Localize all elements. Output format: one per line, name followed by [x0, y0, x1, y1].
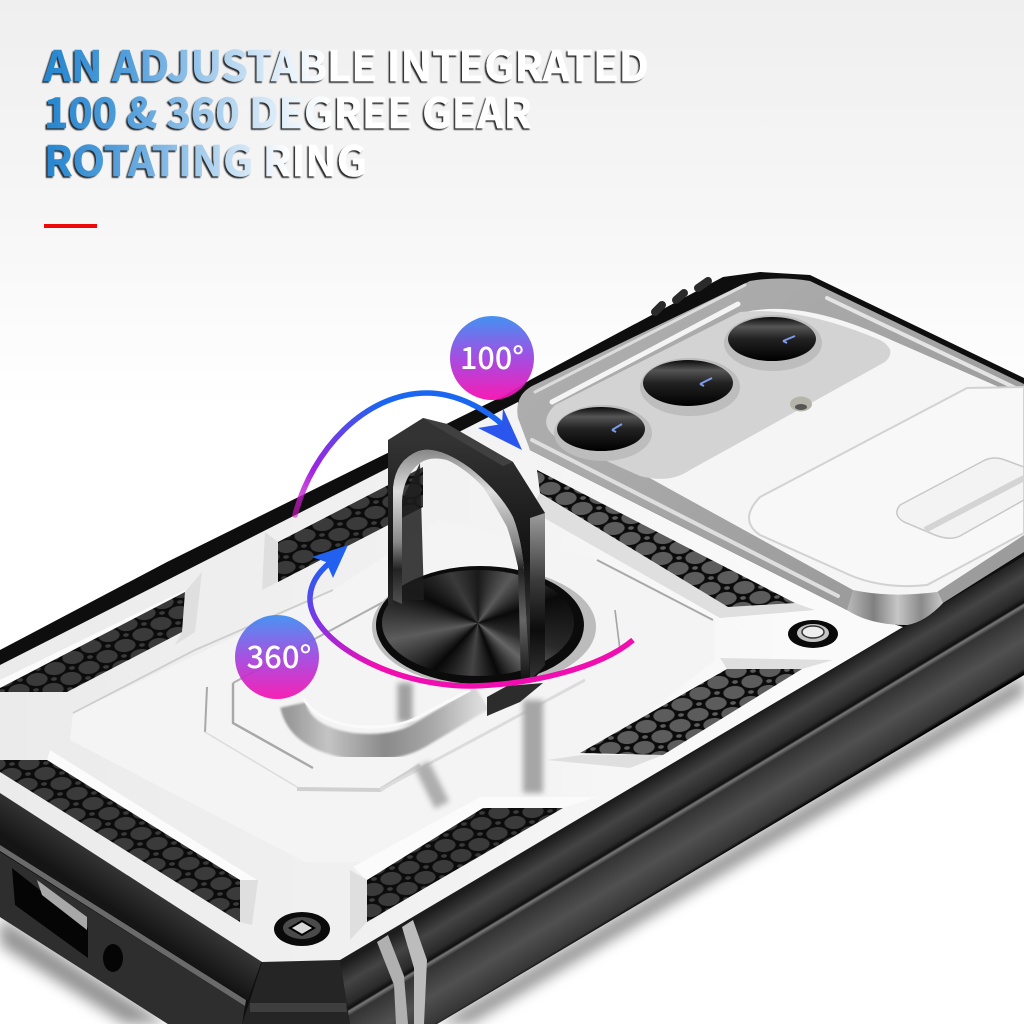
- ring base recess: [372, 567, 596, 687]
- arrowhead: [478, 408, 522, 450]
- lens cover slide: [749, 387, 1024, 586]
- ring inner chrome: [393, 450, 530, 683]
- badge 100 degrees: 100°: [460, 333, 524, 378]
- lens 2: [640, 358, 740, 416]
- lens 3: [724, 315, 822, 371]
- title: [43, 33, 649, 189]
- title line 1: AN ADJUSTABLE INTEGRATED: [43, 33, 649, 94]
- title line 2: 100 & 360 DEGREE GEAR: [44, 80, 532, 141]
- frame corner chrome: [847, 590, 943, 625]
- reflected ring band: [293, 698, 482, 747]
- screw right: [788, 620, 838, 648]
- brushed metal disc: [382, 570, 574, 676]
- badge 100 degrees: [450, 316, 534, 400]
- grip patch under camera: [537, 470, 795, 607]
- side buttons: [655, 281, 708, 312]
- frame highlights: [532, 285, 1024, 596]
- ring base disc: [376, 566, 584, 684]
- white rib highlights: [0, 590, 597, 880]
- title line 3: ROTATING RING: [44, 128, 367, 189]
- grip patch beside ring: [278, 467, 423, 582]
- raised rib bevels: [175, 493, 833, 940]
- black case body: [0, 272, 1024, 1024]
- ring hinge foot: [487, 683, 543, 716]
- arc: [295, 393, 505, 515]
- right bumper face: [340, 556, 1024, 1024]
- flash: [790, 396, 812, 412]
- 100 degree arrow: [295, 393, 522, 515]
- screw bottom: [274, 912, 330, 946]
- arc: [310, 558, 633, 686]
- grip patch right: [580, 669, 802, 755]
- headphone hole: [103, 944, 123, 972]
- red accent bar: [44, 224, 97, 228]
- left side wall: [0, 852, 245, 1024]
- ring outer black frame: [388, 418, 545, 683]
- grip patch bottom centre: [367, 808, 563, 922]
- reflected arm shadows: [405, 683, 533, 805]
- reflected ring inner edge: [303, 690, 470, 727]
- ring reflection: [293, 683, 533, 805]
- ring top facet: [423, 418, 513, 466]
- ridge highlight: [0, 845, 246, 1006]
- camera slider frame: [517, 278, 1024, 625]
- arrowhead: [312, 545, 348, 578]
- ring arm back: [402, 463, 424, 600]
- grip patch bottom left: [0, 760, 240, 922]
- phone case: [0, 272, 1024, 1024]
- bottom corner bumper: [242, 960, 350, 1024]
- corner bumper lines: [250, 1003, 347, 1012]
- slide handle: [897, 458, 1024, 538]
- left side band: [0, 790, 262, 1000]
- plate panel lines: [73, 560, 713, 790]
- ring right facet: [530, 513, 545, 680]
- badge 360 degrees: 360°: [246, 632, 312, 677]
- lens window: [546, 311, 890, 479]
- lens 1: [554, 405, 652, 461]
- badge 360 degrees: [235, 615, 319, 699]
- 360 degree arrow: [310, 545, 633, 686]
- charging port: [12, 868, 88, 958]
- plate centre panel: [70, 520, 715, 862]
- silver stripes: [377, 920, 427, 1024]
- grip patch upper left: [0, 592, 185, 692]
- slider white surface: [548, 309, 1024, 595]
- silver back plate: [0, 402, 903, 962]
- phone shadow: [0, 675, 1024, 1024]
